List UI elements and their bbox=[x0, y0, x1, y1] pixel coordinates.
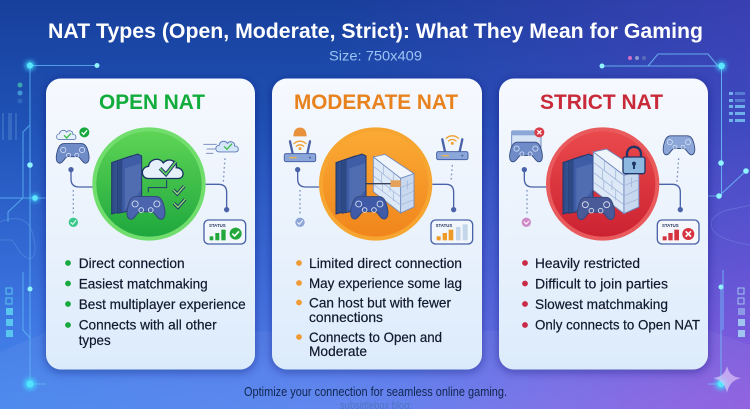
icon: blocked window and controller bbox=[510, 127, 544, 162]
connectors bbox=[296, 165, 456, 215]
heading: strict NAT: STRICT NAT bbox=[540, 90, 663, 114]
footer tagline: Optimize your connection for seamless online gaming. bbox=[244, 385, 507, 399]
icon: right router bbox=[437, 136, 468, 160]
diagram: strict NAT bbox=[510, 127, 699, 244]
panel: open NAT bbox=[46, 78, 255, 370]
connectors bbox=[69, 158, 229, 215]
bullet list: open NAT bbox=[65, 256, 246, 348]
icon: check dot bbox=[69, 218, 78, 227]
bullet list: strict NAT: Difficult to join parties bbox=[535, 276, 668, 292]
bullet list: open NAT: Best multiplayer experience bbox=[79, 297, 246, 312]
panel: moderate NAT bbox=[272, 78, 482, 370]
diagram: open NAT bbox=[56, 127, 246, 244]
icon: left router bbox=[284, 128, 316, 162]
status box bbox=[431, 220, 473, 244]
icon: check dot bbox=[295, 218, 305, 227]
circle icon: console and wall bbox=[319, 127, 432, 241]
bullet list: moderate NAT: Moderate bbox=[309, 344, 367, 359]
status box: STATUS bbox=[662, 223, 679, 228]
icon: sparkle star bbox=[713, 366, 741, 393]
bullet list: strict NAT: Only connects to Open NAT bbox=[535, 318, 701, 332]
circle icon: console and cloud bbox=[92, 127, 206, 241]
subtitle: size: Size: 750x409 bbox=[329, 48, 422, 64]
bullet list: strict NAT: Heavily restricted bbox=[535, 256, 640, 271]
diagram: moderate NAT bbox=[284, 127, 473, 244]
connectors bbox=[522, 158, 682, 215]
heading: open NAT: OPEN NAT bbox=[99, 90, 205, 114]
bullet list: moderate NAT: connections bbox=[309, 310, 383, 325]
bullet list: moderate NAT: May experience some lag bbox=[309, 276, 462, 291]
status box: STATUS bbox=[436, 223, 452, 228]
bullet list: open NAT: Direct connection bbox=[79, 256, 185, 271]
icon: check dot bbox=[522, 218, 531, 227]
icon: right controller bbox=[663, 136, 695, 155]
circuit decoration: left bbox=[0, 60, 100, 390]
bullet list: moderate NAT: Connects to Open and bbox=[309, 330, 442, 345]
circuit decoration: right bbox=[600, 54, 750, 390]
panel: strict NAT bbox=[499, 78, 708, 370]
bullet list: open NAT: Connects with all other bbox=[79, 318, 217, 332]
circle icon: console, wall and lock bbox=[546, 127, 659, 241]
icon: cloud and controller bbox=[56, 127, 89, 163]
status box bbox=[204, 220, 246, 244]
status box bbox=[657, 220, 699, 244]
bullet list: moderate NAT bbox=[296, 256, 462, 359]
bullet list: strict NAT: Slowest matchmaking bbox=[535, 297, 668, 312]
bullet list: strict NAT bbox=[522, 256, 701, 332]
bullet list: moderate NAT: Limited direct connection bbox=[309, 256, 462, 271]
bullet list: moderate NAT: Can host but with fewer bbox=[309, 296, 451, 310]
bullet list: open NAT: types bbox=[79, 333, 111, 348]
icon: fast cloud bbox=[203, 141, 238, 153]
bullet list: open NAT: Easiest matchmaking bbox=[79, 276, 208, 292]
title: NAT Types (Open, Moderate, Strict): What They Mean for Gaming bbox=[48, 20, 703, 43]
status box: STATUS bbox=[209, 223, 226, 228]
heading: moderate NAT: MODERATE NAT bbox=[294, 90, 458, 114]
